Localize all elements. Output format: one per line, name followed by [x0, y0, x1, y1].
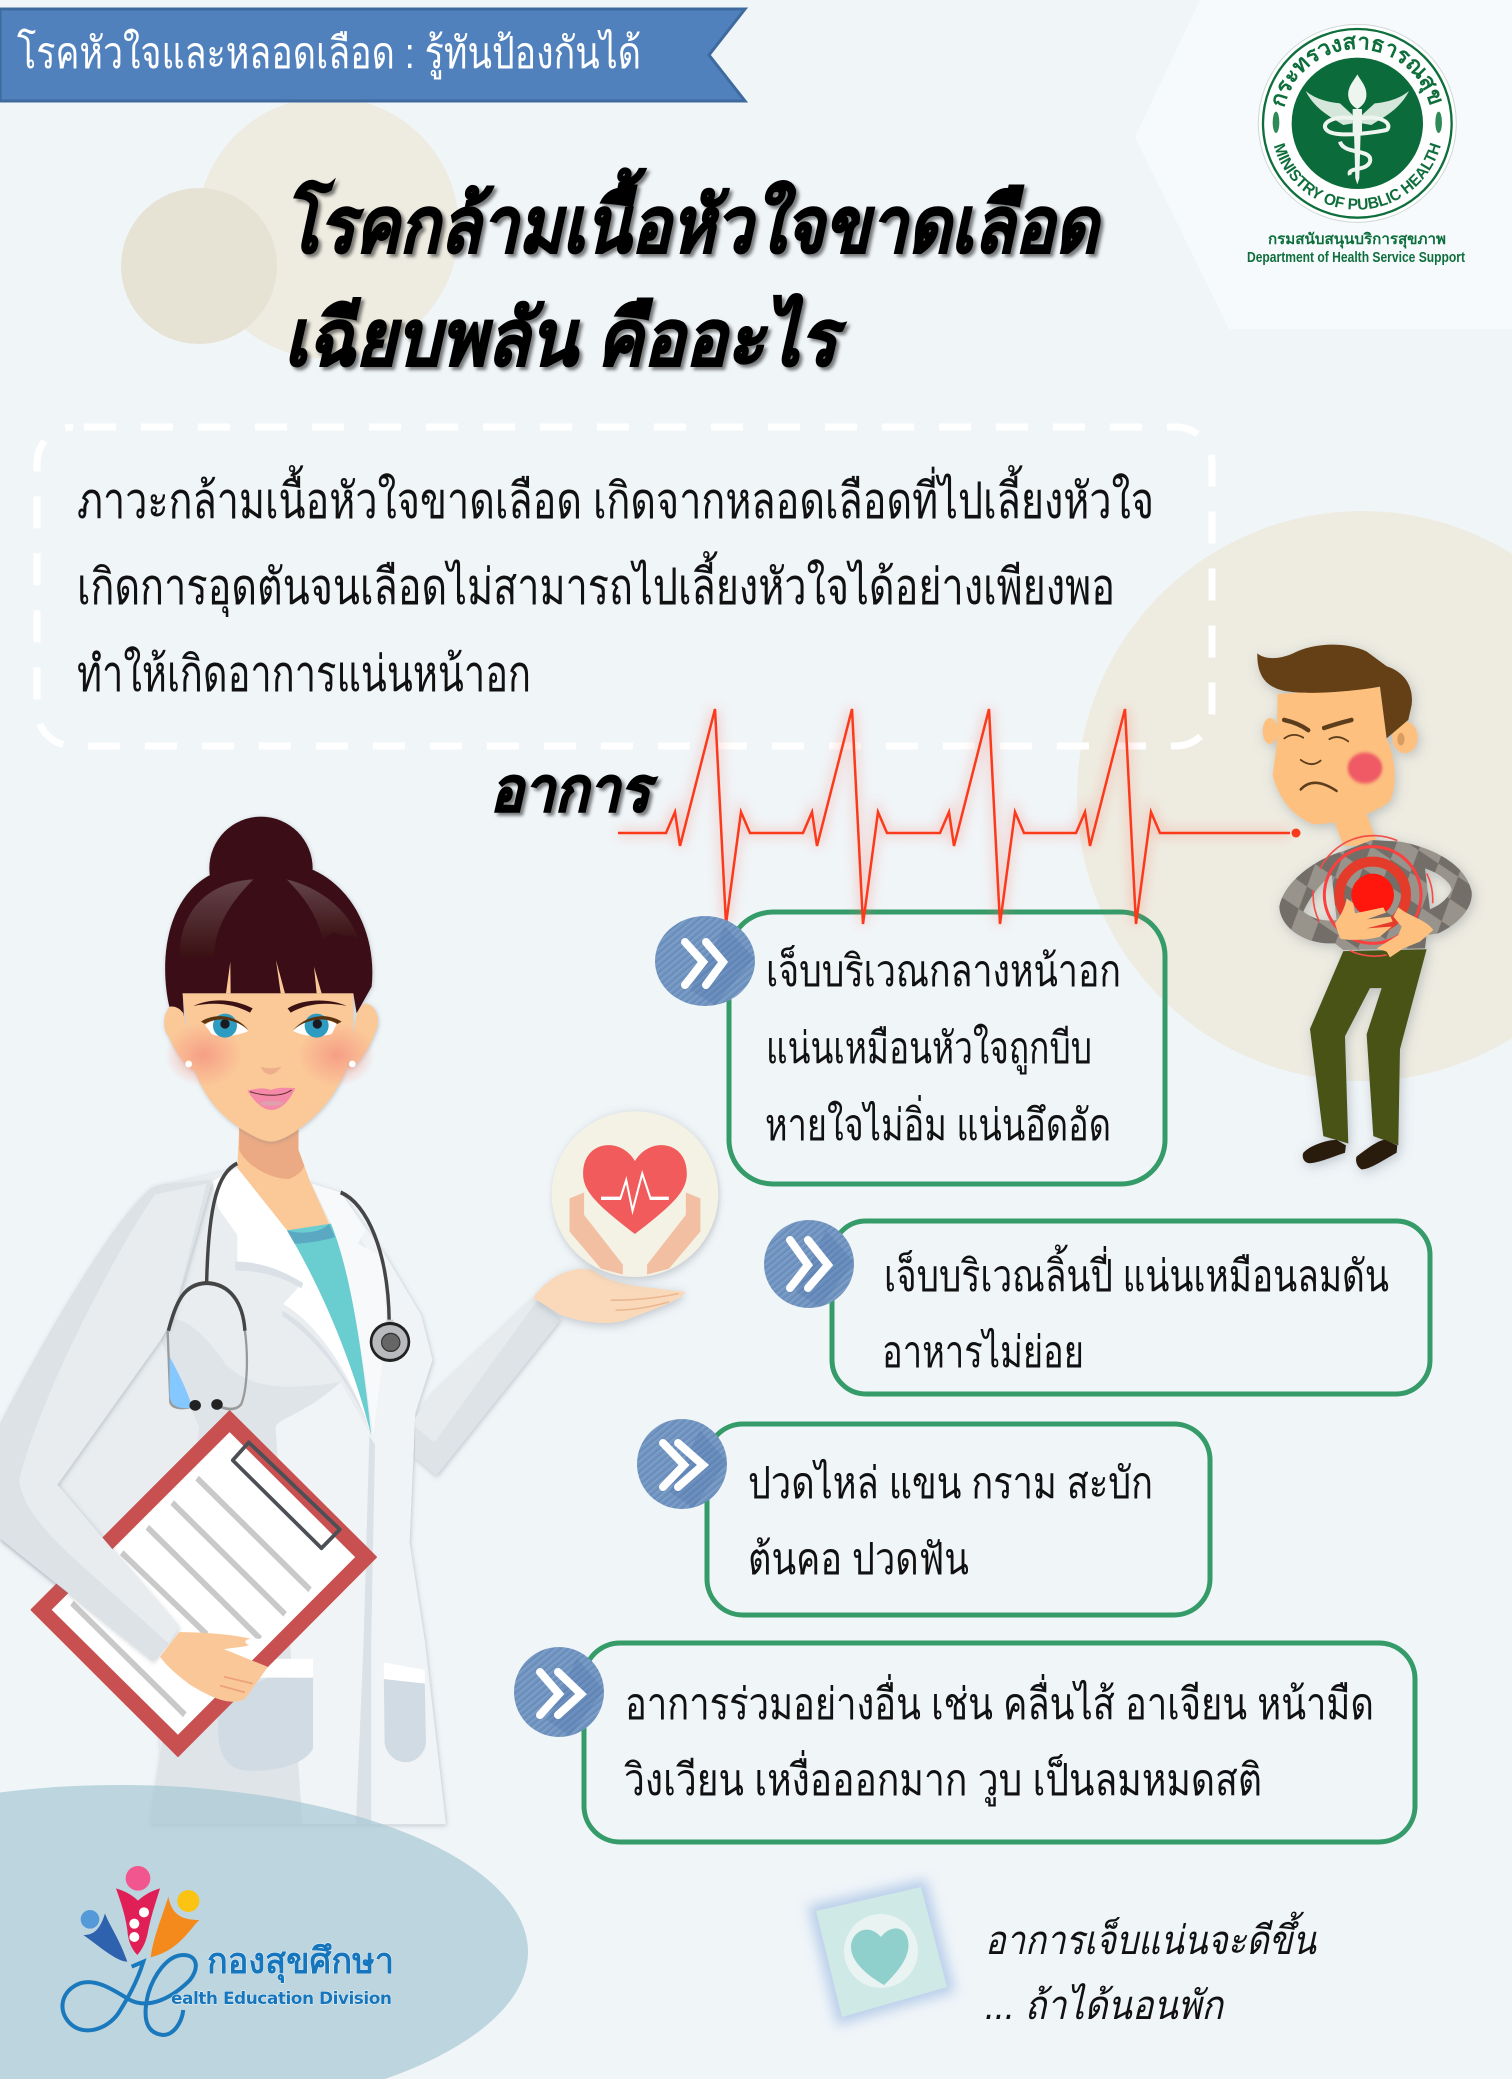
doctor left hand — [160, 1632, 268, 1702]
Health Education Division text: กองสุขศึกษา — [207, 1940, 394, 1984]
beige circle behind man — [1077, 511, 1512, 1081]
title: โรคกล้ามเนื้อหัวใจขาดเลือด — [283, 168, 1102, 269]
hair highlights — [180, 879, 358, 957]
right lapel — [312, 1183, 387, 1436]
man hands — [1335, 898, 1433, 957]
left pocket — [218, 1659, 313, 1771]
eyebrows — [193, 1000, 347, 1013]
man torso — [1279, 836, 1472, 957]
closing note: ... ถ้าได้นอนพัก — [985, 1983, 1225, 2028]
definition text — [77, 465, 1154, 702]
blue ellipse bottom-left — [0, 1785, 528, 2079]
symptom 2 text: อาหารไม่ย่อย — [882, 1327, 1084, 1377]
Health Education Division text: ealth Education Division — [171, 1989, 392, 2009]
logo ring ornaments — [1273, 112, 1442, 133]
doctor head — [164, 817, 378, 1142]
logo caption: กรมสนับสนุนบริการสุขภาพ — [1268, 230, 1446, 249]
logo caption — [1247, 230, 1465, 266]
logo: Ministry of Public Health — [1258, 24, 1457, 223]
beige decorative circles behind title — [121, 97, 459, 359]
symptom box 4 — [584, 1643, 1415, 1842]
ECG line — [618, 709, 1300, 924]
symptom 4 text: อาการร่วมอย่างอื่น เช่น คลื่นไส้ อาเจียน หน้ามืด — [625, 1673, 1374, 1729]
symptom box 2 — [832, 1221, 1430, 1394]
bangs strands — [226, 960, 322, 993]
chevron badge 2 — [764, 1220, 854, 1308]
symptom 3 text: ปวดไหล่ แขน กราม สะบัก — [748, 1458, 1153, 1508]
earrings — [185, 1061, 356, 1067]
coat placket — [356, 1436, 375, 1824]
title — [283, 168, 1102, 382]
stethoscope — [168, 1163, 389, 1411]
closing note — [985, 1911, 1317, 2028]
logo caption: Department of Health Service Support — [1247, 249, 1465, 266]
symptom 2 text: เจ็บบริเวณลิ้นปี่ แน่นเหมือนลมดัน — [884, 1244, 1389, 1301]
coat under-chest shading — [149, 1319, 341, 1824]
definition text: ทำให้เกิดอาการแน่นหน้าอก — [77, 646, 531, 702]
doctor neck — [237, 1128, 329, 1233]
banner — [0, 9, 745, 101]
symptom 1 text: เจ็บบริเวณกลางหน้าอก — [766, 945, 1121, 996]
symptom 1 text — [765, 945, 1121, 1150]
chevron badge 4 — [514, 1647, 604, 1737]
man sweater — [1279, 840, 1472, 950]
heart care badge — [552, 1111, 718, 1277]
nose — [261, 1067, 282, 1075]
title: เฉียบพลัน คืออะไร — [284, 293, 847, 382]
logo ring English text: MINISTRY OF PUBLIC HEALTH — [1274, 142, 1441, 210]
symptom box 1 — [729, 912, 1165, 1184]
eyes — [201, 1014, 342, 1038]
symptom 4 text: วิงเวียน เหงื่อออกมาก วูบ เป็นลมหมดสติ — [624, 1749, 1262, 1807]
chevron badge 3 — [637, 1419, 727, 1509]
heart — [583, 1145, 687, 1234]
closing note: อาการเจ็บแน่นจะดีขึ้น — [985, 1911, 1317, 1963]
symptom 1 text: แน่นเหมือนหัวใจถูกบีบ — [766, 1023, 1092, 1075]
heading: symptoms: อาการ — [490, 756, 658, 825]
coat, arms, clipboard — [0, 1128, 561, 1824]
teal shirt — [287, 1224, 371, 1436]
symptom 4 text — [624, 1673, 1374, 1807]
doctor right hand — [533, 1269, 686, 1323]
clipboard — [31, 1411, 376, 1756]
man lower body and neck — [1303, 814, 1427, 1169]
left lapel — [212, 1168, 371, 1436]
doctor left arm — [0, 1181, 212, 1661]
H swash — [62, 1955, 196, 2035]
symptom 3 text — [748, 1458, 1153, 1584]
sticker: teal heart card — [816, 1887, 947, 2017]
ears — [164, 1007, 195, 1072]
hair — [164, 817, 378, 1142]
blush — [165, 1023, 375, 1087]
man expression — [1284, 720, 1352, 791]
dashed definition box — [37, 427, 1212, 746]
man with chest pain — [1257, 645, 1472, 1169]
logo: Health Education Division — [62, 1866, 199, 2035]
teal heart — [851, 1928, 908, 1985]
lips — [247, 1088, 295, 1110]
caring hands — [570, 1193, 700, 1275]
right pocket — [384, 1662, 426, 1762]
symptom 2 text — [882, 1244, 1389, 1377]
chevron badge 1 — [655, 916, 755, 1006]
coat silhouette — [0, 1168, 561, 1824]
stethoscope chest piece — [370, 1320, 410, 1362]
definition text: ภาวะกล้ามเนื้อหัวใจขาดเลือด เกิดจากหลอดเลือดที่ไปเลี้ยงหัวใจ — [77, 465, 1154, 529]
doctor illustration — [0, 817, 686, 1824]
right side of coat — [276, 1192, 446, 1824]
symptom 1 text: หายใจไม่อิ่ม แน่นอึดอัด — [765, 1094, 1111, 1150]
top-right light hexagon panel — [1135, 0, 1512, 329]
figures — [81, 1866, 199, 1962]
face — [183, 993, 353, 1142]
Health Education Division text — [171, 1940, 394, 2009]
symptom 3 text: ต้นคอ ปวดฟัน — [748, 1535, 969, 1584]
heartbeat — [601, 1173, 669, 1211]
red cheek — [1348, 752, 1382, 784]
symptom box 3 — [707, 1424, 1210, 1615]
caduceus emblem — [1306, 74, 1409, 184]
definition text: เกิดการอุดตันจนเลือดไม่สามารถไปเลี้ยงหัวใจได้อย่างเพียงพอ — [77, 551, 1115, 617]
logo ring Thai text: กระทรวงสาธารณสุข — [1273, 35, 1442, 107]
banner text: โรคหัวใจและหลอดเลือด : รู้ทันป้องกันได้ — [17, 28, 641, 80]
chest pain rings — [1313, 836, 1433, 956]
man head — [1257, 645, 1418, 824]
